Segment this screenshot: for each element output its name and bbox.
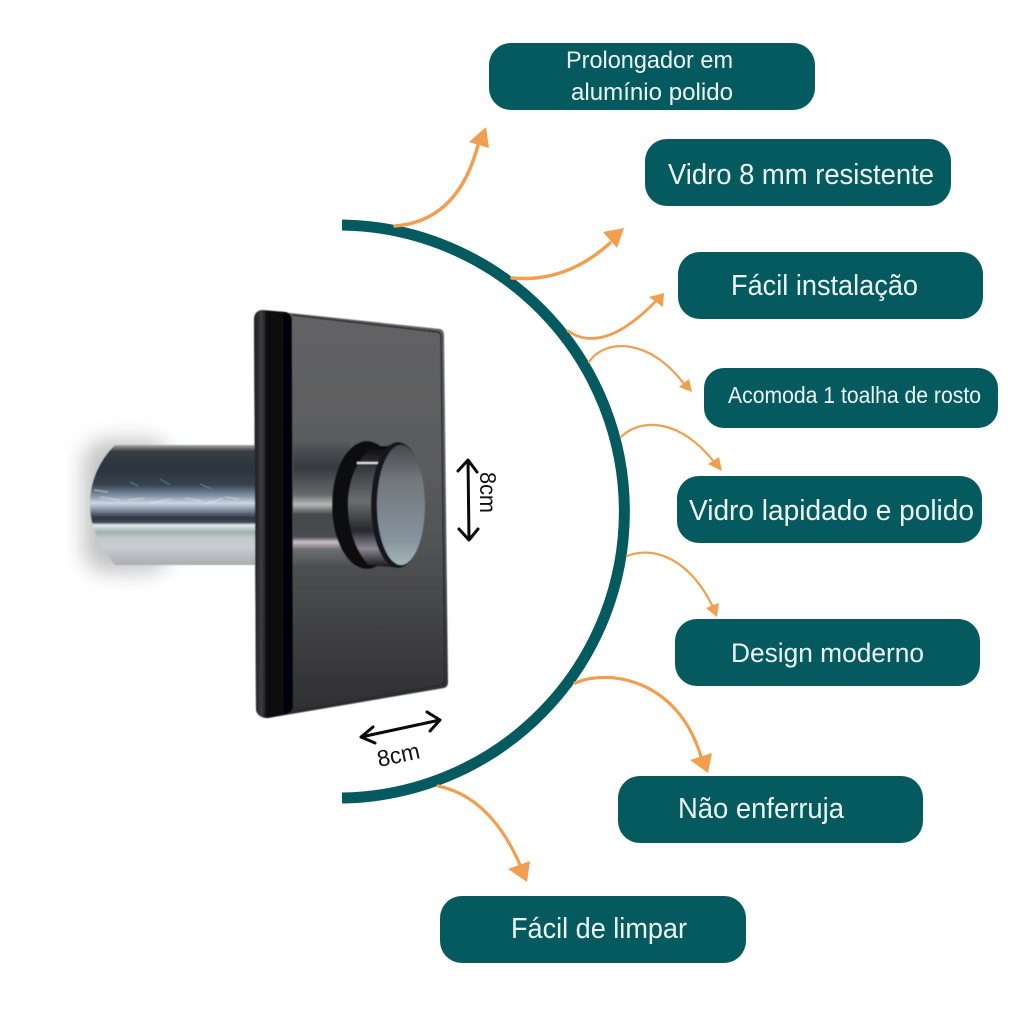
label: Prolongador em alumínio polido: Prolongador em <box>566 47 733 74</box>
dark plate edge <box>254 310 293 718</box>
arrow 5 <box>621 425 722 471</box>
aluminium tube <box>90 445 256 565</box>
arrow 4 <box>589 346 692 392</box>
label: Prolongador em alumínio polido <box>489 43 815 110</box>
dimension: vertical 8cm <box>458 460 501 540</box>
dimension: vertical 8cm: 8cm <box>475 472 501 513</box>
arrow 3 <box>568 293 664 338</box>
black ring <box>332 441 402 569</box>
label: Fácil instalação: Fácil instalação <box>731 270 918 302</box>
label: Fácil instalação <box>678 252 983 319</box>
label: Não enferruja <box>618 776 923 843</box>
label: Fácil de limpar: Fácil de limpar <box>511 913 687 945</box>
semicircular arc <box>342 225 624 798</box>
label: Vidro 8 mm resistente: Vidro 8 mm resistente <box>668 159 934 191</box>
plate bevel <box>292 315 445 712</box>
cap rim <box>371 442 425 568</box>
metal collar <box>348 443 400 568</box>
arrow 2 <box>512 228 624 279</box>
arrow 1 <box>395 127 489 226</box>
tube highlights <box>94 479 239 504</box>
tube shadow <box>84 440 169 572</box>
cap face <box>377 445 425 565</box>
label: Vidro 8 mm resistente <box>645 139 951 206</box>
label: Prolongador em alumínio polido: alumínio polido <box>571 79 733 106</box>
label: Design moderno <box>675 619 980 686</box>
product photo: towel hook <box>84 310 448 718</box>
label: Acomoda 1 toalha de rosto <box>704 368 998 428</box>
tube section in front of plate <box>293 442 350 567</box>
label: Vidro lapidado e polido: Vidro lapidado e polido <box>689 495 974 527</box>
dimension: horizontal 8cm: 8cm <box>375 738 422 772</box>
arrow 7 <box>575 677 712 773</box>
label: Não enferruja: Não enferruja <box>678 793 845 825</box>
arrow 8 <box>438 786 530 882</box>
label: Vidro lapidado e polido <box>677 476 982 543</box>
dimension: horizontal 8cm <box>361 712 440 772</box>
label: Design moderno: Design moderno <box>731 638 924 668</box>
arrow 6 <box>627 553 719 617</box>
label: Fácil de limpar <box>440 896 746 963</box>
collar highlight <box>357 462 378 464</box>
glass plate <box>254 310 448 718</box>
ring inner <box>338 446 388 566</box>
label: Acomoda 1 toalha de rosto: Acomoda 1 toalha de rosto <box>728 382 981 408</box>
